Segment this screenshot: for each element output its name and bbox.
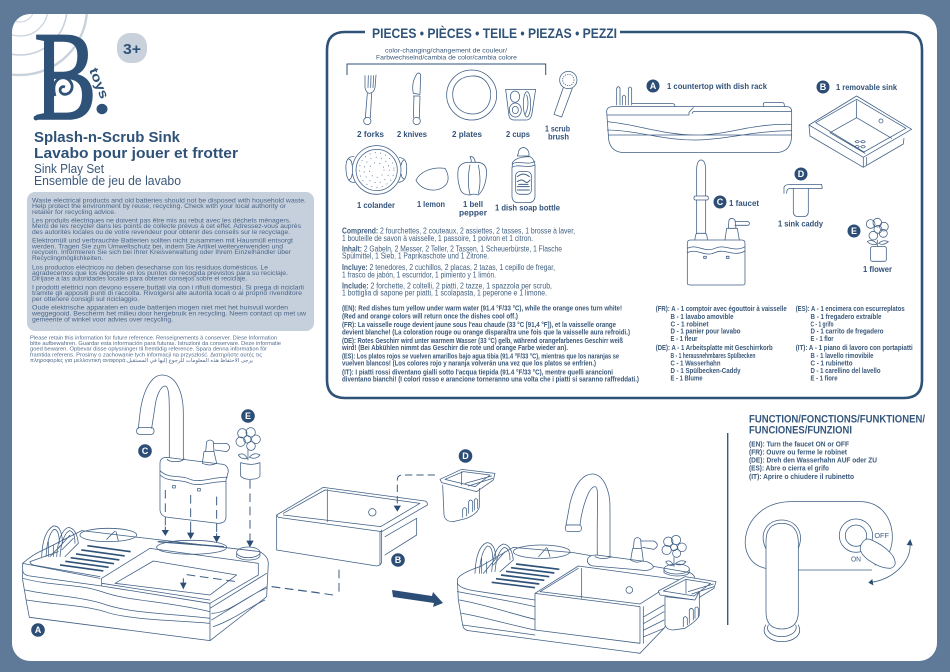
text: parts legend FR and DE: (FR): A - 1 comptoir avec égouttoir à vaisselle [656, 304, 787, 313]
colour-changing note and bracket [347, 48, 546, 75]
callout: part B [816, 80, 897, 94]
age badge 3+: 3+ [123, 42, 141, 58]
text: contents in other languages: Include: 2 forchette, 2 coltelli, 2 piatti, 2 tazze, 1 spazzola per scrub, [342, 281, 552, 290]
text: parts legend FR and DE: C - 1 robinet [670, 320, 709, 328]
text: parts legend ES and IT: (IT): A - 1 piano di lavoro con portapiatti [796, 343, 913, 352]
panel: battery disposal notice: I prodotti elettrici non devono essere buttati via con i rifiuti domestici. Si prega di riciclarli [32, 284, 304, 291]
callout: part B: 1 removable sink [836, 82, 897, 92]
text: colour change explanation: (ES): Los platos rojos se vuelven amarillos bajo agua tibia (91.4 °F/33 °C), mientras que los naranjas se [342, 351, 619, 360]
text: parts legend ES and IT: B - 1 fregadero extraíble [810, 312, 882, 321]
tap diagram [745, 502, 913, 642]
icon: bell pepper [458, 157, 487, 195]
part B: removable sink [809, 96, 912, 167]
callout: C [138, 444, 152, 458]
callout: part C: 1 faucet [729, 198, 759, 208]
part D: caddy [784, 184, 822, 217]
retention note [30, 335, 282, 364]
callout: E: E [245, 411, 251, 421]
callout: B [391, 553, 405, 567]
callout: part E: E [851, 226, 857, 236]
retention note: goed bewaren. Opbevar disse oplysninger til fremtidig reference. Spara denna information för [30, 347, 267, 353]
panel: battery disposal notice: werden. Tragen Sie zum Umweltschutz bei, indem Sie Artikel weiterverwenden und [31, 243, 283, 250]
labels for row 1: 2 plates [452, 129, 482, 139]
text: contents in other languages: 1 frasco de jabón, 1 escurridor, 1 pimiento y 1 limón. [342, 270, 496, 279]
age badge 3+ [117, 33, 147, 63]
panel: battery disposal notice: Les produits électriques ne doivent pas être mis au rebut avec les déchets ménagers. [32, 218, 291, 224]
panel: battery disposal notice: tramite gli appositi punti di raccolta. Rivolgersi alle autorità locali o al proprio rivenditore [32, 290, 302, 297]
labels for row 2 [357, 199, 560, 218]
text: parts legend FR and DE: C - 1 Wasserhahn [670, 358, 720, 367]
callout: part D [778, 168, 823, 229]
parts illustrations [607, 87, 912, 285]
part E: flower [866, 218, 888, 261]
panel: battery disposal notice: per ottenere consigli sul riciclaggio. [32, 296, 139, 303]
part C: faucet [687, 160, 749, 285]
labels for row 2: 1 lemon [417, 199, 445, 209]
icon: lemon [416, 168, 448, 190]
panel: battery disposal notice: Merci de les recycler dans les points de collecte prévus à cet effet. Adressez-vous auprès [32, 223, 302, 230]
heading: function: FUNCTION/FONCTIONS/FUNKTIONEN/ [749, 413, 925, 425]
callout: part B: B [820, 82, 827, 92]
callout: part D: D [798, 169, 805, 179]
text: contents in other languages: 1 bouteille de savon à vaisselle, 1 passoire, 1 poivron et 1 citron. [342, 234, 533, 243]
faucet C exploded [137, 375, 230, 543]
title block: Sink Play Set [34, 162, 104, 176]
icon: colander [346, 146, 407, 194]
colour-changing note and bracket: Farbwechselnd/cambia de color/cambia colore [376, 54, 517, 61]
panel: battery disposal notice: Diríjase a las autoridades locales para obtener consejos sobre el reciclaje. [32, 276, 247, 283]
heading: pieces: PIECES • PIÈCES • TEILE • PIEZAS • PEZZI [372, 25, 617, 41]
arrow: assembly to finished sink [392, 590, 443, 607]
panel: battery disposal notice: Help protect the environment by reuse, recycling. Check with your local authority or [32, 203, 287, 210]
text: parts legend ES and IT: E - 1 fiore [810, 374, 838, 383]
tap diagram: OFF [874, 531, 890, 540]
text: colour change explanation: wird! (Bei Abkühlen nimmt das Geschirr die rote und orange Farbe wieder an). [341, 343, 568, 352]
panel: battery disposal notice: des autorités locales ou de votre revendeur pour obtenir des conseils sur le recyclage. [32, 229, 290, 236]
text: function instructions: (EN): Turn the faucet ON or OFF [749, 439, 849, 448]
text: contents in other languages [342, 226, 575, 298]
logo: B toys: toys [86, 66, 112, 101]
labels for row 1 [357, 124, 570, 142]
retention note: Please retain this information for future reference. Renseignements à conserver. Diese Information [30, 335, 277, 341]
callout: E [241, 409, 255, 423]
icon: scrub brush [554, 71, 577, 117]
callout: part A: A [650, 81, 657, 91]
assembly diagram: removable sink B [272, 475, 435, 595]
text: parts legend FR and DE: D - 1 Spülbecken-Caddy [670, 366, 740, 375]
panel: battery disposal notice: Oude elektrische apparaten en oude batterijen mogen niet met het huisvuil worden [32, 304, 288, 311]
text: colour change explanation: (DE): Rotes Geschirr wird unter warmem Wasser (33 °C) gelb, während orangefarbenes Geschirr weiß [342, 336, 623, 345]
assembled sink [457, 474, 716, 653]
text: parts legend ES and IT: C - 1 rubinetto [810, 358, 853, 367]
panel: battery disposal notice [27, 192, 314, 331]
decorative ripple arcs [12, 14, 88, 76]
text: parts legend FR and DE: (DE): A - 1 Arbeitsplatte mit Geschirrkorb [656, 343, 773, 352]
icon: fork [364, 75, 376, 125]
callout: D [459, 449, 472, 463]
text: colour change explanation: devient blanche! (La coloration rouge ou orange disparaîtra une fois que la vaisselle aura refroidi.) [342, 327, 631, 336]
text: colour change explanation: (FR): La vaisselle rouge devient jaune sous l'eau chaude (33 °C [91,4 °F]), et la vaisselle orange [342, 320, 616, 329]
icon: dish soap bottle [512, 147, 535, 203]
callout: D: D [462, 451, 469, 461]
assembly diagram: exploded view [23, 375, 318, 641]
panel: battery disposal notice: agradecemos que los deposite en los puntos de recogida previstos para su reciclaje. [32, 270, 288, 277]
text: parts legend ES and IT: (ES): A - 1 encimera con escurreplatos [796, 304, 905, 313]
labels for row 2: 1 bell [463, 199, 483, 209]
title block: Lavabo pour jouer et frotter [34, 145, 238, 162]
callout: part E [848, 224, 893, 274]
pieces icons, row 1 [364, 70, 577, 125]
colour-changing note and bracket: color-changing/changement de couleur/ [385, 48, 507, 54]
callout: part A: 1 countertop with dish rack [667, 81, 767, 91]
labels for row 1: brush [548, 132, 569, 142]
part A: countertop [607, 87, 792, 153]
labels for row 2: 1 dish soap bottle [495, 203, 560, 213]
text: parts legend ES and IT: C - 1 grifo [810, 320, 834, 328]
callout: A: A [35, 625, 42, 635]
labels for row 1: 2 knives [397, 129, 427, 139]
panel: battery disposal notice: Waste electrical products and old batteries should not be disposed with household waste. [32, 198, 306, 204]
icon: knife [413, 73, 421, 125]
text: contents in other languages: 1 bottiglia di sapone per piatti, 1 scolapasta, 1 peperone e 1 limone. [342, 289, 547, 298]
divider line [727, 433, 729, 625]
text: colour change explanation: diventano bianchi! (I colori rosso e arancione torneranno una volta che i piatti si saranno raffreddati.) [342, 374, 640, 383]
labels for row 2: pepper [459, 208, 488, 218]
text: parts legend FR and DE: D - 1 panier pour lavabo [670, 327, 741, 336]
callout: part E: 1 flower [863, 264, 893, 274]
retention note: πληροφορίες για μελλοντική αναφορά. [30, 357, 127, 364]
text: contents in other languages: Comprend: 2 fourchettes, 2 couteaux, 2 assiettes, 2 tasses, 1 brosse à laver, [342, 226, 575, 235]
panel: battery disposal notice: recyceln. Informieren Sie sich bei Ihrer Kreisverwaltung oder Ihrem Einzelhändler über [32, 249, 292, 256]
panel: battery disposal notice: weggegooid. Bescherm het milieu door hergebruik en recycling. Neem contact op met uw [31, 310, 306, 317]
panel: pieces outline [327, 32, 922, 398]
panel: battery disposal notice: Elektromüll und verbrauchte Batterien sollten nicht zusammen mit Hausmüll entsorgt [32, 238, 293, 245]
panel: battery disposal notice: gemeente of winkel voor advies over recycling. [32, 316, 173, 323]
text: function instructions: (ES): Abre o cierra el grifo [749, 464, 829, 473]
retention note: bitte aufbewahren. Guardar esta información para futuras. Istruzioni da conservare. Deze informatie [30, 341, 282, 347]
flower E exploded [236, 428, 260, 547]
logo: B toys: B [34, 6, 97, 147]
base sink A [23, 526, 318, 641]
assembly diagram: caddy D [440, 469, 495, 522]
text: function instructions: (FR): Ouvre ou ferme le robinet [749, 447, 847, 456]
heading: function [749, 413, 925, 436]
text: parts legend FR and DE [656, 304, 787, 383]
callout: part A [646, 80, 767, 92]
title block: Ensemble de jeu de lavabo [34, 174, 181, 188]
text: contents in other languages: Inhalt: 2 Gabeln, 2 Messer, 2 Teller, 2 Tassen, 1 Scheuerbürste, 1 Flasche [342, 245, 562, 254]
text: colour change explanation: vuelven blancos! (Los colores rojo y naranja volverán una vez que los platos se enfríen.) [342, 359, 597, 368]
retention note: يرجى الاحتفاظ هذه المعلومات للرجوع إليها في المستقبل [127, 358, 253, 364]
text: function instructions: (IT): Aprire o chiudere il rubinetto [749, 472, 854, 481]
icon: cup [506, 89, 536, 120]
text: contents in other languages: Incluye: 2 tenedores, 2 cuchillos, 2 placas, 2 tazas, 1 cepillo de fregar, [342, 263, 555, 272]
text: colour change explanation: (IT): I piatti rossi diventano gialli sotto l'acqua tiepida (91.4 °F/33 °C), mentre quelli arancioni [342, 367, 613, 376]
callout: part C: C [717, 197, 724, 207]
text: colour change explanation [341, 304, 640, 383]
panel: battery disposal notice: retailer for recycling advice. [32, 209, 116, 216]
text: contents in other languages: Spülmittel, 1 Sieb, 1 Paprikaschote und 1 Zitrone. [342, 252, 489, 261]
text: function instructions: (DE): Dreh den Wasserhahn AUF oder ZU [749, 456, 877, 465]
text: parts legend FR and DE: B - 1 lavabo amovible [670, 312, 734, 321]
tap diagram: ON [851, 555, 861, 564]
text: colour change explanation: (Red and orange colors will return once the dishes cool off.) [342, 311, 519, 320]
retention note: framtida referens. Prosimy o zachowanie tych informacji na przyszłość. Διατηρήστε αυτές τις [30, 351, 262, 358]
title block: Splash-n-Scrub Sink [34, 129, 181, 146]
text: parts legend ES and IT [796, 304, 913, 383]
text: parts legend ES and IT: D - 1 carellino del lavello [810, 366, 881, 375]
text: colour change explanation: (EN): Red dishes turn yellow under warm water (91.4 °F/33 °C), while the orange ones turn white! [342, 304, 622, 313]
callout: A [31, 623, 45, 637]
heading: function: FUNCIONES/FUNZIONI [749, 424, 852, 436]
text: parts legend FR and DE: E - 1 Blume [670, 374, 702, 383]
text: parts legend FR and DE: B - 1 herausnehmbares Spülbecken [670, 351, 756, 360]
callout: part C [714, 196, 759, 208]
text: parts legend ES and IT: E - 1 flor [810, 334, 834, 343]
text: function instructions [749, 439, 877, 481]
pieces icons, row 2 [346, 146, 535, 203]
callout: B: B [395, 555, 402, 565]
labels for row 1: 1 scrub [545, 124, 570, 134]
icon: plate [447, 70, 497, 120]
labels for row 1: 2 cups [506, 129, 530, 139]
labels for row 1: 2 forks [357, 129, 384, 139]
text: parts legend ES and IT: D - 1 carrito de fregadero [810, 327, 884, 336]
text: parts legend ES and IT: B - 1 lavello rimovibile [810, 351, 874, 360]
callout: part D: 1 sink caddy [778, 219, 823, 229]
panel: battery disposal notice: Recyclingmöglichkeiten. [32, 255, 103, 262]
labels for row 2: 1 colander [357, 200, 396, 210]
text: parts legend FR and DE: E - 1 fleur [670, 334, 698, 343]
panel: battery disposal notice: Los productos eléctricos no deben desecharse con los residuos domésticos. Le [32, 264, 268, 271]
title block [34, 129, 238, 188]
callout: C: C [142, 446, 149, 456]
